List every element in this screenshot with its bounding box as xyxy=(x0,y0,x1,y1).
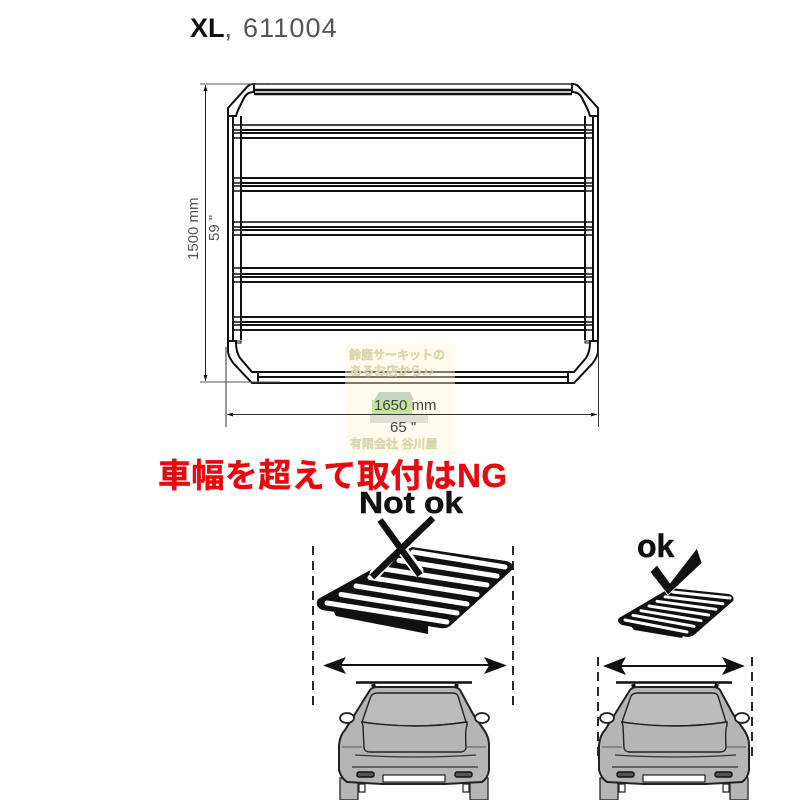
car rear view: not ok xyxy=(339,682,489,800)
label: ok: ok xyxy=(637,528,675,564)
dimension: width xyxy=(226,340,598,436)
dashed limits: fitted rack xyxy=(598,657,752,756)
watermark: 有限会社 谷川屋 xyxy=(350,436,437,451)
width arrow: oversized rack xyxy=(323,657,507,674)
rack body xyxy=(317,547,513,628)
width arrow: fitted rack xyxy=(603,657,745,675)
cross mark xyxy=(372,518,433,577)
check mark xyxy=(650,548,702,595)
watermark xyxy=(345,344,455,455)
dashed limits: oversized rack xyxy=(313,546,513,706)
dimension: height: 1500 mm xyxy=(185,197,202,260)
rack body xyxy=(618,588,734,637)
rack left side rail xyxy=(228,84,258,383)
rack crossbars xyxy=(241,84,585,383)
rack slats xyxy=(625,592,730,632)
dimension: width: 65 " xyxy=(390,419,416,436)
title: 611004 xyxy=(243,13,338,43)
watermark truck xyxy=(370,392,428,423)
rack slats xyxy=(327,552,505,622)
watermark: 鈴鹿サーキットの xyxy=(349,347,445,362)
watermark: あるお店から♪♪ xyxy=(350,364,434,378)
rack skirt xyxy=(630,625,684,638)
car rear view: ok xyxy=(599,682,749,800)
dimension: height xyxy=(185,84,280,382)
red warning text: 車幅を超えて取付はNG xyxy=(158,457,507,494)
dimension: width: 1650 mm xyxy=(374,397,437,414)
oversized rack illustration xyxy=(317,547,513,634)
roof rack top-view diagram xyxy=(228,84,598,383)
title: XL, xyxy=(190,13,232,43)
fitted rack illustration xyxy=(618,588,734,638)
dimension: height: 59 " xyxy=(206,215,223,241)
rack skirt xyxy=(331,606,428,634)
rack right side rail xyxy=(568,84,598,383)
label: Not ok: Not ok xyxy=(359,485,464,520)
